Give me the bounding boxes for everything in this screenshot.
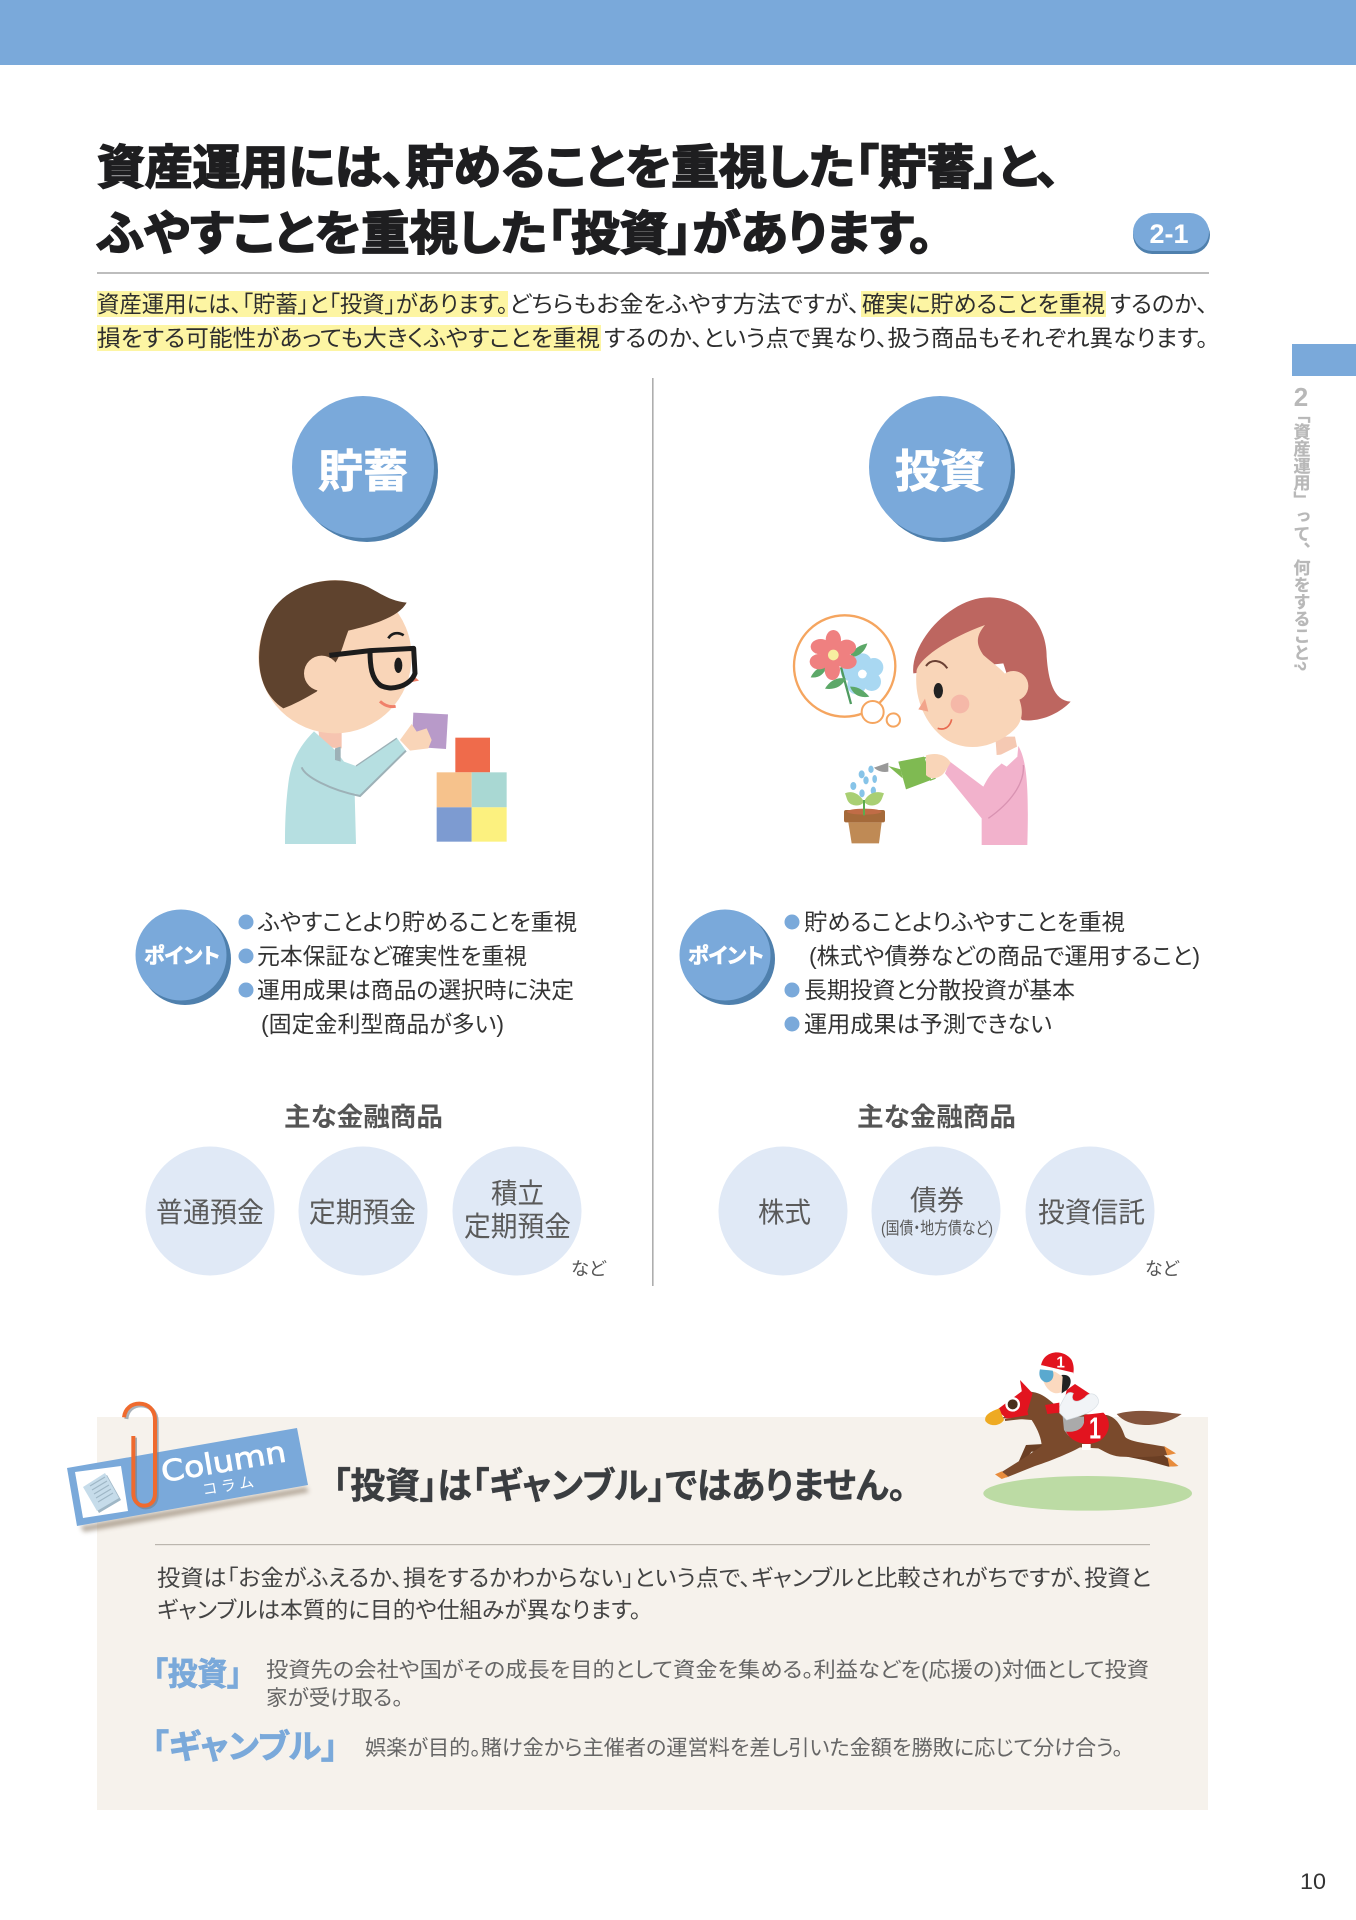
definition: investment: 家が受け取る。 bbox=[266, 1687, 403, 1710]
illustration: man stacking blocks bbox=[258, 580, 507, 844]
heading circle: savings bbox=[292, 396, 438, 542]
point badge: investment: ポイント bbox=[688, 945, 764, 968]
page number: 10 bbox=[1300, 1869, 1326, 1894]
illustration: racehorse and jockey bbox=[983, 1352, 1192, 1511]
products: investment: 主な金融商品 bbox=[857, 1102, 1016, 1132]
column heading: 「投資」は「ギャンブル」ではありません。 bbox=[333, 1465, 906, 1506]
title: ふやすことを重視した「投資」があります。 bbox=[97, 207, 933, 260]
section badge 2-1: 2-1 bbox=[1150, 219, 1188, 249]
intro text: どちらもお金をふやす方法ですが、 bbox=[509, 291, 860, 317]
side tab bbox=[1290, 344, 1356, 671]
point list: savings: 運用成果は商品の選択時に決定 bbox=[257, 977, 574, 1003]
products: investment: 投資信託 bbox=[1038, 1197, 1145, 1228]
point list: savings: ふやすことより貯めることを重視 bbox=[257, 909, 577, 935]
heading circle: savings: 貯蓄 bbox=[318, 446, 408, 497]
intro text: 損をする可能性があっても大きくふやすことを重視 bbox=[97, 325, 600, 351]
side tab: 「資産運用」って、何をすること? bbox=[1290, 406, 1310, 671]
products: investment bbox=[718, 1102, 1180, 1279]
center divider bbox=[652, 378, 654, 1286]
illustration: racehorse and jockey: 1 bbox=[1089, 1411, 1101, 1445]
heading circle: investment: 投資 bbox=[895, 446, 985, 497]
title rule bbox=[97, 272, 1209, 274]
point badge: savings: ポイント bbox=[144, 945, 220, 968]
column tag bbox=[67, 1428, 309, 1532]
definition: investment: 「投資」 bbox=[153, 1656, 242, 1692]
title: 資産運用には、貯めることを重視した「貯蓄」と、 bbox=[97, 141, 1060, 194]
products: savings: など bbox=[571, 1259, 607, 1279]
definition: gamble: 「ギャンブル」 bbox=[152, 1728, 338, 1765]
top banner bbox=[0, 0, 1356, 65]
products: investment: 株式 bbox=[758, 1197, 811, 1228]
side tab: 2 bbox=[1294, 382, 1308, 412]
point list: investment: 運用成果は予測できない bbox=[804, 1011, 1052, 1037]
products: savings: 普通預金 bbox=[156, 1197, 264, 1228]
intro text bbox=[97, 291, 1208, 351]
section badge 2-1 bbox=[1133, 213, 1210, 254]
products: investment: 債券 bbox=[910, 1185, 964, 1216]
products: savings: 定期預金 bbox=[464, 1211, 571, 1242]
definition: gamble bbox=[152, 1728, 1123, 1765]
point list: investment bbox=[784, 909, 1200, 1037]
column rule bbox=[155, 1544, 1150, 1545]
intro text: するのか、 bbox=[1110, 291, 1208, 317]
panel: column bbox=[67, 1404, 1208, 1810]
intro text: 資産運用には、「貯蓄」と「投資」があります。 bbox=[97, 291, 508, 317]
illustration: woman watering plant bbox=[794, 597, 1071, 845]
point list: investment: (株式や債券などの商品で運用すること) bbox=[809, 943, 1200, 969]
products: investment: など bbox=[1145, 1259, 1180, 1279]
column tag: Column bbox=[159, 1435, 288, 1489]
products: savings: 積立 bbox=[491, 1178, 544, 1209]
products: savings bbox=[146, 1102, 607, 1279]
icon: paper clip bbox=[124, 1404, 157, 1507]
heading circle: investment bbox=[869, 396, 1015, 542]
intro text: するのか、という点で異なり、扱う商品もそれぞれ異なります。 bbox=[604, 325, 1208, 351]
point list: savings: (固定金利型商品が多い) bbox=[261, 1011, 504, 1037]
products: savings: 定期預金 bbox=[309, 1197, 416, 1228]
column intro text: 投資は「お金がふえるか、損をするかわからない」という点で、ギャンブルと比較されがちですが、投資と bbox=[157, 1566, 1151, 1591]
point list: savings bbox=[238, 909, 577, 1037]
definition: investment bbox=[153, 1656, 1149, 1710]
column intro text: ギャンブルは本質的に目的や仕組みが異なります。 bbox=[157, 1598, 641, 1623]
intro text: 確実に貯めることを重視 bbox=[862, 291, 1105, 317]
title bbox=[97, 141, 1060, 260]
column intro text bbox=[157, 1566, 1151, 1623]
definition: investment: 投資先の会社や国がその成長を目的として資金を集める。利益などを(応援の)対価として投資 bbox=[266, 1659, 1149, 1682]
column tag: コラム bbox=[202, 1473, 260, 1499]
point badge: investment bbox=[680, 910, 775, 1005]
products: investment: (国債・地方債など) bbox=[881, 1219, 993, 1238]
definition: gamble: 娯楽が目的。賭け金から主催者の運営料を差し引いた金額を勝敗に応じて分け合う。 bbox=[365, 1737, 1123, 1760]
point list: investment: 貯めることよりふやすことを重視 bbox=[804, 909, 1125, 935]
point badge: savings bbox=[136, 910, 231, 1005]
point list: savings: 元本保証など確実性を重視 bbox=[257, 943, 527, 969]
illustration: racehorse and jockey: 1 bbox=[1056, 1354, 1065, 1371]
point list: investment: 長期投資と分散投資が基本 bbox=[804, 977, 1075, 1003]
products: savings: 主な金融商品 bbox=[284, 1102, 443, 1132]
